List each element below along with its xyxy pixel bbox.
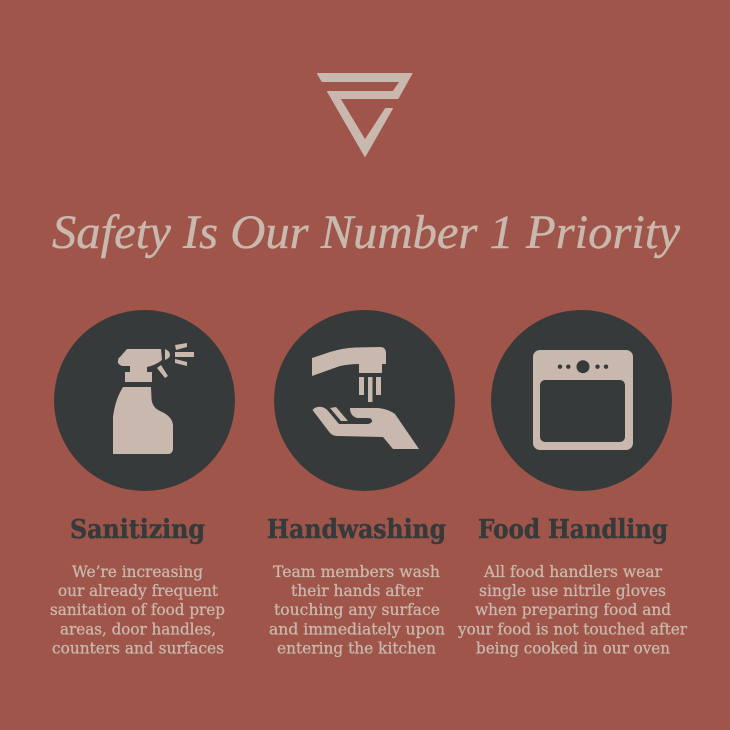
heading: food handling: Food Handling (478, 515, 668, 545)
panel: sanitizing (50, 310, 235, 658)
text: handwashing description: entering the kitchen (277, 638, 436, 658)
text: food handling description (457, 562, 687, 658)
title: Safety Is Our Number 1 Priority (52, 206, 681, 259)
text: sanitizing description: We’re increasing (72, 562, 203, 581)
heading: handwashing: Handwashing (267, 515, 446, 545)
panel: handwashing (267, 310, 455, 658)
text: handwashing description: their hands after (291, 581, 423, 600)
icon: tap and hand (274, 310, 455, 491)
text: handwashing description (269, 562, 445, 658)
text: sanitizing description: areas, door handles, (60, 620, 216, 638)
panel: food handling (457, 310, 687, 658)
heading: sanitizing: Sanitizing (70, 515, 205, 545)
icon: spray bottle (54, 310, 235, 491)
text: food handling description: your food is not touched after (457, 620, 687, 638)
text: sanitizing description: our already frequent (58, 581, 219, 600)
text: food handling description: single use nitrile gloves (479, 581, 666, 600)
text: food handling description: All food handlers wear (483, 562, 662, 581)
text: handwashing description: touching any surface (274, 600, 440, 619)
text: handwashing description: and immediately upon (269, 620, 445, 638)
text: sanitizing description: sanitation of food prep (50, 600, 225, 619)
text: handwashing description: Team members wash (273, 562, 440, 581)
text: sanitizing description: counters and surfaces (52, 638, 224, 658)
text: sanitizing description (50, 562, 225, 658)
logo (318, 74, 412, 156)
icon: oven (491, 310, 672, 491)
text: food handling description: when preparing food and (475, 600, 671, 619)
text: food handling description: being cooked in our oven (476, 638, 670, 658)
